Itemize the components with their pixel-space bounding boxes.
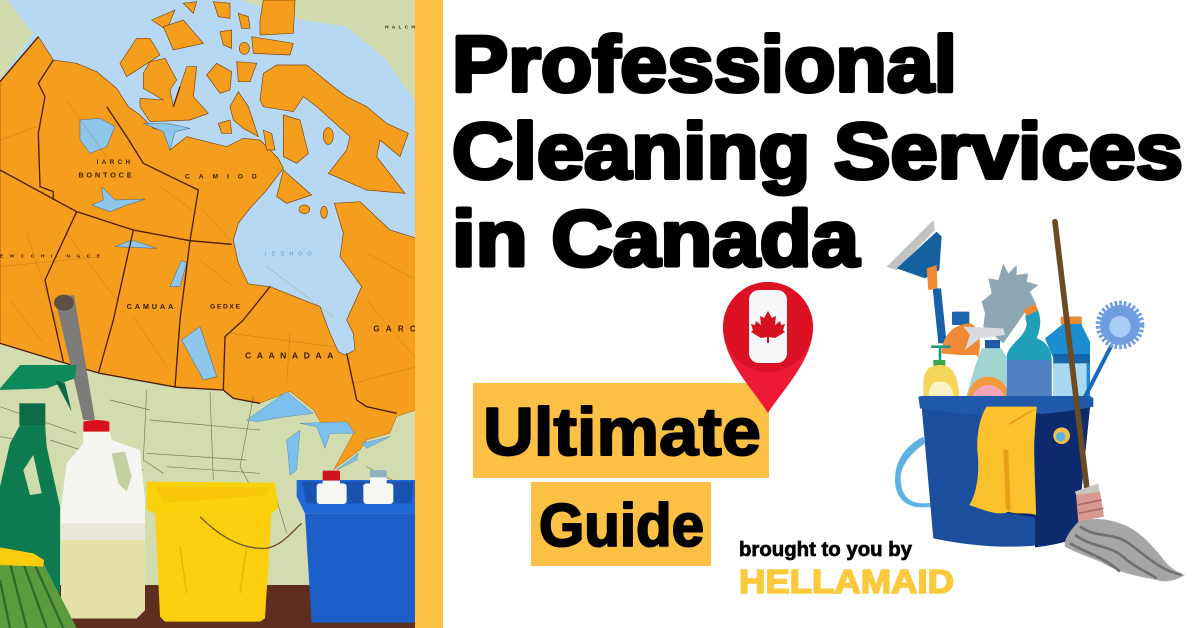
map: place labels: GARC — [373, 325, 416, 334]
map: Canada mainland — [0, 37, 417, 470]
map: province detail lines — [0, 100, 417, 383]
panel: map photo — [0, 0, 417, 628]
map: place labels: GEDXE — [210, 304, 241, 311]
badge: Ultimate: Ultimate — [483, 394, 761, 470]
heading line 1: Professional — [452, 19, 957, 108]
icon: grey mop handle — [54, 295, 95, 420]
icon: yellow cloth — [969, 407, 1040, 518]
map: Great Lakes — [247, 392, 390, 475]
credit: brought to you by: brought to you by — [739, 539, 913, 561]
map: place labels: CAANADAA — [245, 351, 334, 361]
logo: Hellamaid: HELLAMAID — [739, 563, 954, 600]
map: place labels: BONTOCE — [78, 170, 132, 179]
map: bay label: IDDHOO — [265, 252, 312, 258]
icon: teal cleaner bottle — [1007, 304, 1052, 407]
map: place labels: CAMUAA — [127, 302, 174, 311]
map: place labels: CAMIOD — [185, 173, 257, 180]
icon: Canada location pin — [723, 282, 813, 413]
map: grid and state lines — [0, 390, 417, 533]
icon: broom — [0, 547, 77, 628]
table top — [0, 585, 417, 628]
map: place labels: IARCH — [97, 160, 130, 166]
map: arctic islands — [120, 0, 408, 218]
icon: squeegee brush — [887, 220, 947, 343]
map: US territory — [0, 343, 417, 600]
icon: yellow pump bottle — [923, 347, 959, 403]
map: place labels — [0, 25, 416, 361]
icon: white jug — [61, 420, 145, 618]
icon: yellow bucket — [147, 482, 302, 622]
icon: green spray bottle — [0, 365, 77, 593]
heading line 2: Cleaning Services — [452, 106, 1183, 195]
yellow divider strip — [415, 0, 443, 628]
illustration: cleaning bucket — [887, 220, 1185, 581]
icon: string mop — [1055, 222, 1185, 581]
icon: blue bottle — [1045, 317, 1090, 407]
map: place labels: EWCCHI NGCE — [0, 253, 101, 259]
map: northern land — [0, 0, 417, 103]
heading line 3: in Canada — [452, 194, 860, 282]
icon: feather duster — [982, 263, 1038, 343]
icon: blue bin — [297, 470, 417, 623]
map: inland water — [80, 118, 217, 380]
icon: blue bucket body — [895, 396, 1093, 547]
map: ocean background — [0, 0, 417, 628]
map: place labels: HALCH — [385, 25, 415, 31]
icon: spray bottle — [963, 327, 1008, 418]
badge: Guide: Guide — [539, 492, 704, 559]
icon: orange bottle — [942, 312, 980, 405]
icon: blue duster — [1082, 303, 1142, 403]
heading — [452, 19, 1183, 282]
map: province borders — [0, 37, 397, 413]
